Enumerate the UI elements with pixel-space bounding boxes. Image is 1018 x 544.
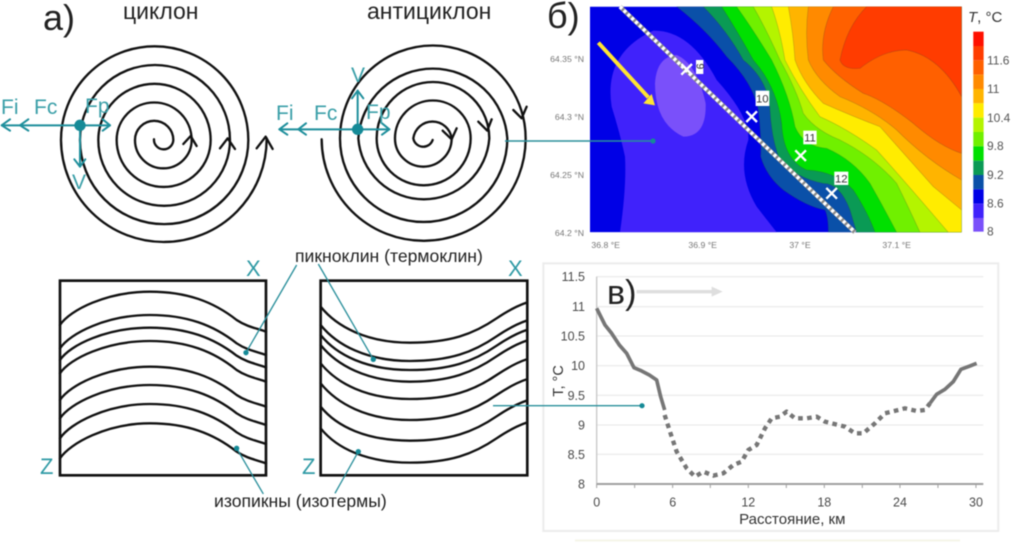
cross-section: anticyclone isopycnals xyxy=(321,281,527,475)
colour scale: 8.6 xyxy=(987,196,1004,210)
station 11 xyxy=(795,131,817,161)
y axis tick labels: 8.5 xyxy=(568,448,585,462)
axis labels X and Z xyxy=(40,256,523,479)
chart frame xyxy=(543,263,998,531)
map axis labels: 64.2 °N xyxy=(555,228,584,238)
panel: b) temperature map xyxy=(547,0,1011,250)
colour scale: 11 xyxy=(987,82,1000,96)
cyclone spiral xyxy=(61,46,273,242)
station 9 xyxy=(681,60,706,75)
grey direction arrow xyxy=(637,287,723,297)
y axis tick labels: 11 xyxy=(572,300,585,314)
axis labels X and Z: Z xyxy=(40,454,53,479)
y axis tick labels: 9 xyxy=(578,418,585,432)
colour scale xyxy=(968,9,1011,238)
x axis tick labels: 0 xyxy=(593,496,600,510)
anticyclone force vectors xyxy=(279,91,389,135)
panel: c) temperature line chart xyxy=(543,263,998,531)
anticyclone force labels: Fc xyxy=(314,102,337,125)
anticyclone force labels: Fp xyxy=(366,101,391,124)
callout line: anticyclone to map xyxy=(505,138,656,144)
y axis tick labels: 10 xyxy=(571,359,585,373)
chart axes xyxy=(597,277,983,488)
grid lines xyxy=(597,277,983,454)
cyclone force labels: Fp xyxy=(85,95,110,118)
temperature line xyxy=(597,308,977,477)
axis labels X and Z: X xyxy=(246,256,261,281)
x axis tick labels xyxy=(593,496,983,510)
x axis tick labels: 6 xyxy=(669,496,676,510)
contour map xyxy=(590,7,962,232)
y axis tick labels: 10.5 xyxy=(561,330,585,344)
y axis tick labels: 9.5 xyxy=(568,389,585,403)
colour scale: 8 xyxy=(987,224,994,238)
x axis tick labels: 12 xyxy=(741,496,755,510)
station 11: 11 xyxy=(804,133,816,145)
map axis labels: 37.1 °E xyxy=(882,240,911,250)
map axis labels: 36.9 °E xyxy=(688,240,717,250)
map axis labels: 64.3 °N xyxy=(555,112,584,122)
y axis tick labels: 8 xyxy=(578,478,585,492)
heading: c): в) xyxy=(607,274,636,312)
transect line xyxy=(620,7,855,232)
axis labels X and Z: X xyxy=(508,256,523,281)
colour scale: 9.8 xyxy=(987,139,1004,153)
cyclone force vectors xyxy=(2,119,110,167)
colour scale: 9.2 xyxy=(987,168,1004,182)
x axis tick labels: 30 xyxy=(969,496,983,510)
axis labels X and Z: Z xyxy=(302,454,315,479)
yellow arrow xyxy=(598,43,655,105)
cyclone force labels: V xyxy=(72,171,86,194)
cyclone force labels xyxy=(1,95,110,194)
station 12 xyxy=(826,172,848,199)
colour scale: 11.6 xyxy=(987,54,1010,68)
label: isopycnals: изопикны (изотермы) xyxy=(214,491,387,511)
colour scale: 10.4 xyxy=(987,111,1011,125)
x axis tick labels: 24 xyxy=(893,496,907,510)
cyclone force labels: Fi xyxy=(1,96,18,119)
station 10: 10 xyxy=(756,94,769,106)
anticyclone force labels: V xyxy=(351,64,365,87)
station 9: 9 xyxy=(694,63,706,69)
anticyclone spiral xyxy=(322,45,527,241)
callout line: anticyclone section to chart xyxy=(493,403,645,408)
x axis tick labels: 18 xyxy=(817,496,831,510)
map axis labels: 37 °E xyxy=(789,240,811,250)
map axis labels: 64.25 °N xyxy=(550,170,584,180)
x axis title: Расстояние, км xyxy=(739,511,845,528)
cross-section: cyclone isopycnals xyxy=(60,281,266,475)
y axis title: T, °C xyxy=(551,365,567,397)
station 12: 12 xyxy=(835,174,848,186)
colour scale: T, °C xyxy=(968,9,1003,26)
station 10 xyxy=(746,91,769,122)
cyclone force labels: Fc xyxy=(34,96,57,119)
callout leader lines xyxy=(234,264,376,494)
anticyclone force labels xyxy=(276,64,391,125)
label: pycnocline: пикноклин (термоклин) xyxy=(295,246,483,266)
y axis tick labels: 11.5 xyxy=(562,270,585,284)
map axis labels: 36.8 °E xyxy=(591,240,620,250)
map axis labels xyxy=(550,54,911,250)
map axis labels: 64.35 °N xyxy=(550,54,584,64)
y axis tick labels xyxy=(561,270,585,492)
panel: a) cyclone and anticyclone diagrams xyxy=(1,0,527,511)
anticyclone force labels: Fi xyxy=(276,102,294,125)
